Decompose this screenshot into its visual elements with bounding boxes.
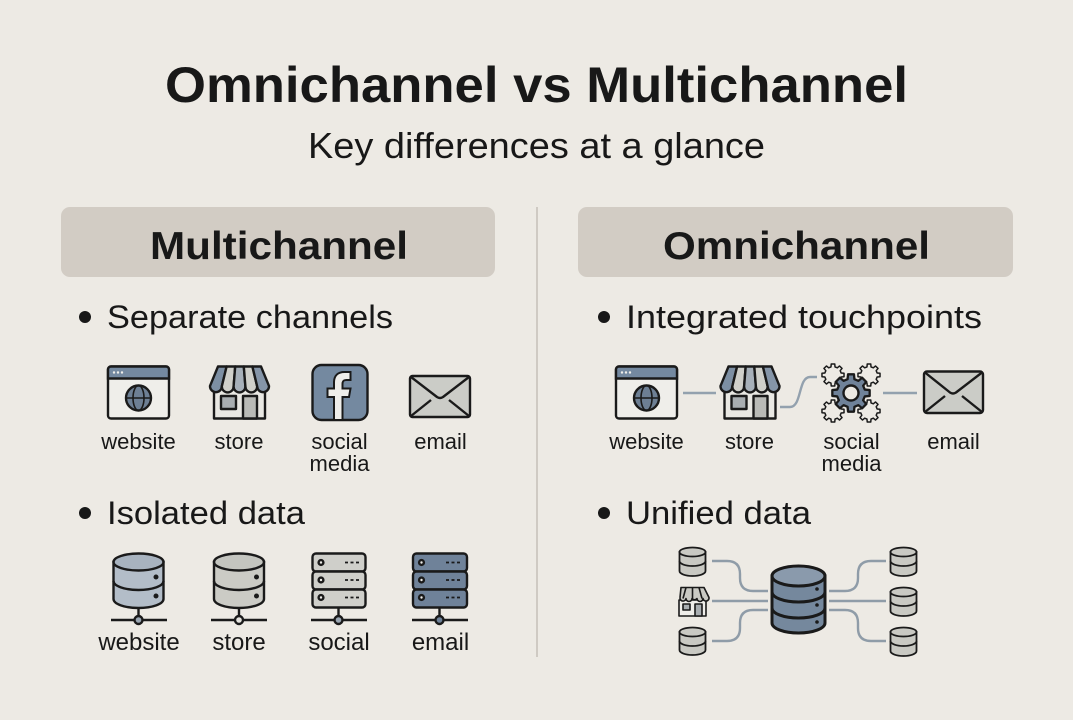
label: website: website — [100, 429, 176, 454]
panel: multichannel — [61, 207, 495, 656]
icon: store — [720, 366, 780, 418]
label: social media: media — [822, 451, 882, 476]
panel: omnichannel — [578, 207, 1013, 656]
icon: social server — [311, 554, 367, 624]
icon: social media — [312, 365, 368, 420]
central database — [772, 566, 825, 633]
small database top right — [890, 548, 916, 576]
icon: store — [210, 366, 269, 418]
connector: store to social — [780, 377, 817, 407]
omnichannel header: Omnichannel — [663, 225, 930, 268]
bullet: separate channels: Separate channels — [107, 299, 393, 335]
icon: website — [108, 366, 169, 418]
title: Omnichannel vs Multichannel — [165, 57, 908, 113]
small database bottom right — [890, 628, 916, 656]
label: email: email — [927, 429, 980, 454]
label: social media: media — [310, 451, 370, 476]
label: website: website — [608, 429, 684, 454]
bullet: isolated data: Isolated data — [107, 495, 305, 531]
small database bottom left — [680, 628, 706, 655]
label: social: social — [308, 629, 370, 656]
label: store: store — [212, 629, 266, 656]
label: website: website — [97, 629, 180, 656]
icon: gears — [822, 364, 880, 422]
connectors — [712, 561, 886, 641]
label: store: store — [215, 429, 263, 454]
small store — [679, 588, 709, 616]
icon: website — [616, 366, 677, 418]
bullet: unified data: Unified data — [626, 495, 811, 531]
connector: website to store — [683, 392, 716, 394]
omnichannel header — [578, 207, 1013, 277]
icon: store database — [211, 554, 267, 624]
label: store: store — [725, 429, 774, 454]
icon: email — [924, 372, 983, 413]
label: social media: social — [823, 429, 880, 454]
icon: website database — [111, 554, 167, 624]
small database top left — [680, 548, 706, 576]
subtitle: Key differences at a glance — [308, 125, 765, 166]
multichannel header — [61, 207, 495, 277]
label: social media: social — [311, 429, 368, 454]
multichannel header: Multichannel — [150, 225, 408, 268]
label: email: email — [414, 429, 467, 454]
icon: email server — [412, 554, 468, 624]
connector: social to email — [883, 392, 917, 394]
label: email: email — [412, 629, 469, 656]
icon: email — [410, 376, 470, 417]
unified data hub diagram — [679, 548, 916, 656]
small database middle right — [890, 588, 916, 616]
bullet: integrated touchpoints: Integrated touchpoints — [626, 299, 982, 335]
